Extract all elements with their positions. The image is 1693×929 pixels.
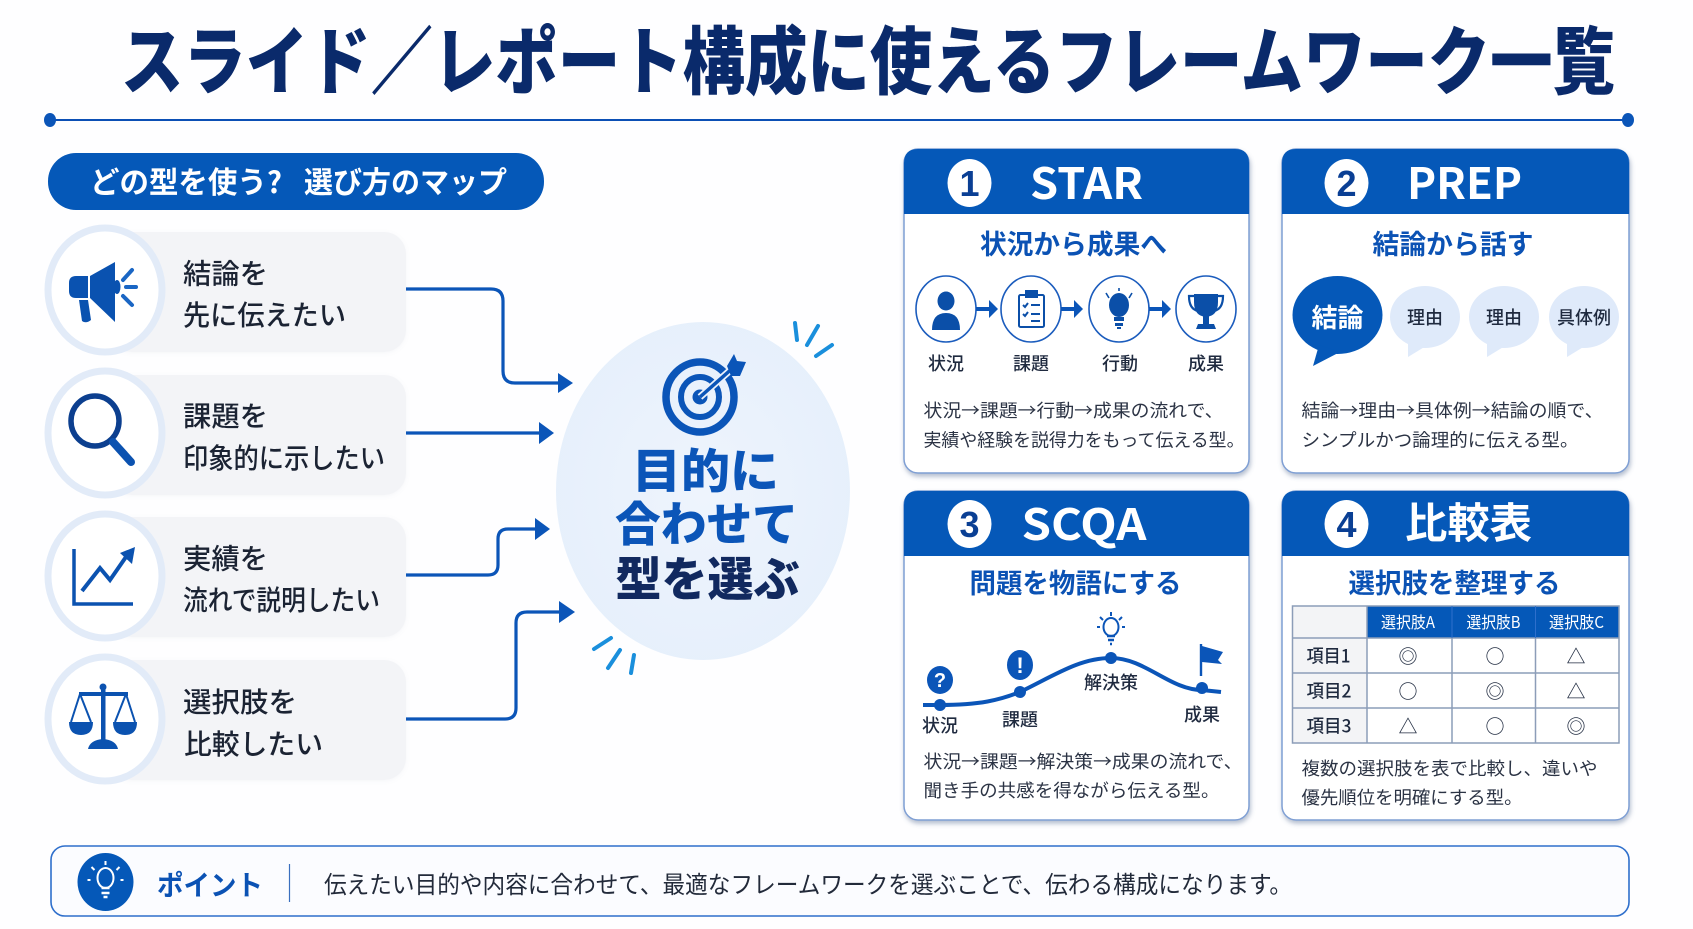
bubble: conclusion bbox=[1292, 276, 1382, 366]
row: show issue bbox=[48, 371, 406, 495]
curve labels: 課題 bbox=[1002, 706, 1038, 732]
card description bbox=[1302, 755, 1598, 810]
table symbols: ○ bbox=[1398, 677, 1418, 704]
title rule bbox=[44, 113, 1634, 127]
table header labels: 選択肢C bbox=[1549, 609, 1604, 633]
table row labels: 項目1 bbox=[1306, 642, 1350, 668]
card subtitle: 状況から成果へ bbox=[980, 223, 1167, 262]
icon: bulb outline bbox=[1097, 612, 1125, 644]
card header bbox=[904, 491, 1249, 556]
card header: 比較表 bbox=[1405, 490, 1532, 551]
bubble: reason: 理由 bbox=[1486, 304, 1522, 330]
card description bbox=[1302, 397, 1604, 452]
row text: 課題を bbox=[183, 395, 268, 435]
table symbols: △ bbox=[1566, 642, 1586, 669]
flow labels bbox=[928, 350, 1224, 376]
row text bbox=[183, 395, 385, 477]
row: explain results bbox=[48, 514, 406, 638]
table header labels: 選択肢A bbox=[1381, 609, 1435, 633]
card header bbox=[904, 149, 1249, 214]
row text: 結論を bbox=[183, 252, 268, 292]
icon: trophy bbox=[1189, 294, 1223, 329]
card header: 1 bbox=[959, 163, 980, 204]
panel: comparison table bbox=[1282, 490, 1629, 820]
row text: 実績を bbox=[183, 538, 268, 578]
card header: 2 bbox=[1336, 163, 1357, 204]
table row labels: 項目3 bbox=[1306, 712, 1352, 738]
flow labels: 成果 bbox=[1188, 350, 1224, 376]
table row labels: 項目2 bbox=[1306, 678, 1352, 704]
table row labels bbox=[1306, 642, 1352, 738]
curve labels: 状況 bbox=[922, 712, 958, 738]
card subtitle: 問題を物語にする bbox=[970, 562, 1182, 601]
sparks: upper right bbox=[795, 323, 832, 356]
table symbols: ○ bbox=[1485, 642, 1505, 669]
row text: 印象的に示したい bbox=[183, 437, 385, 477]
curve labels bbox=[922, 669, 1220, 738]
card subtitle: 結論から話す bbox=[1372, 223, 1534, 262]
bubble: reason bbox=[1469, 286, 1539, 357]
row: conclusion first bbox=[48, 228, 406, 352]
card header: SCQA bbox=[1022, 491, 1147, 553]
card header bbox=[1282, 490, 1629, 556]
table symbols: △ bbox=[1566, 677, 1586, 704]
row text bbox=[183, 252, 346, 334]
icon: target bbox=[666, 354, 746, 432]
card description: 状況→課題→解決策→成果の流れで、 bbox=[924, 748, 1242, 774]
card header: 3 bbox=[959, 504, 980, 545]
row text: 流れで説明したい bbox=[183, 579, 380, 619]
goal circle bbox=[556, 322, 850, 660]
bubble: example bbox=[1549, 286, 1619, 357]
icon: question bbox=[927, 666, 953, 694]
table symbols: ◎ bbox=[1398, 642, 1418, 669]
map heading pill: どの型を使う? bbox=[90, 158, 282, 202]
icon: megaphone bbox=[69, 262, 136, 322]
card header: 4 bbox=[1336, 504, 1357, 545]
table header labels: 選択肢B bbox=[1466, 609, 1520, 633]
flow diagram bbox=[916, 276, 1236, 376]
bubble: example: 具体例 bbox=[1557, 304, 1611, 330]
point text: 伝えたい目的や内容に合わせて、最適なフレームワークを選ぶことで、伝わる構成になります。 bbox=[324, 865, 1292, 900]
icon: clipboard bbox=[1019, 291, 1044, 327]
row text: 選択肢を bbox=[183, 681, 297, 721]
map heading pill: 選び方のマップ bbox=[304, 158, 507, 202]
flow labels: 行動 bbox=[1102, 350, 1138, 376]
story curve bbox=[922, 612, 1223, 738]
goal text bbox=[615, 433, 800, 610]
card header bbox=[1282, 149, 1629, 214]
row: compare options bbox=[48, 657, 406, 781]
panel: PREP bbox=[1282, 149, 1629, 473]
curve labels: 解決策 bbox=[1084, 669, 1138, 695]
flow labels: 課題 bbox=[1013, 350, 1049, 376]
map heading pill bbox=[48, 153, 544, 210]
card description: 状況→課題→行動→成果の流れで、 bbox=[924, 397, 1224, 423]
card description: 優先順位を明確にする型。 bbox=[1302, 784, 1522, 810]
comparison table bbox=[1292, 606, 1619, 743]
row text: 比較したい bbox=[184, 723, 323, 763]
table symbols: ◎ bbox=[1485, 677, 1505, 704]
row text bbox=[183, 538, 380, 619]
card description: 実績や経験を説得力をもって伝える型。 bbox=[924, 426, 1244, 452]
card header: PREP bbox=[1407, 150, 1522, 212]
arrow: row 4 to goal bbox=[406, 601, 575, 719]
table symbols bbox=[1398, 642, 1586, 739]
icon: flag bbox=[1201, 644, 1223, 676]
icon: magnifier bbox=[71, 396, 131, 462]
arrow: row 3 to goal bbox=[406, 518, 550, 575]
table symbols: ○ bbox=[1485, 712, 1505, 739]
bubble: reason: 理由 bbox=[1407, 304, 1443, 330]
card description: シンプルかつ論理的に伝える型。 bbox=[1302, 426, 1578, 452]
card description bbox=[924, 748, 1242, 803]
table symbols: ◎ bbox=[1566, 712, 1586, 739]
icon: question: ? bbox=[934, 670, 946, 692]
flow labels: 状況 bbox=[928, 350, 964, 376]
goal text: 目的に bbox=[632, 433, 779, 502]
card description: 複数の選択肢を表で比較し、違いや bbox=[1302, 755, 1598, 781]
icon: scales bbox=[69, 684, 137, 749]
table header labels bbox=[1381, 609, 1604, 633]
bubble: conclusion: 結論 bbox=[1312, 298, 1364, 335]
curve labels: 成果 bbox=[1184, 701, 1220, 727]
row text bbox=[183, 681, 323, 763]
card description: 結論→理由→具体例→結論の順で、 bbox=[1302, 397, 1604, 423]
panel: SCQA bbox=[904, 491, 1249, 820]
goal text: 型を選ぶ bbox=[616, 541, 800, 610]
arrow: row 1 to goal bbox=[406, 289, 573, 393]
goal text: 合わせて bbox=[615, 486, 798, 555]
icon: person bbox=[932, 292, 960, 330]
card header: STAR bbox=[1030, 150, 1143, 212]
card description: 聞き手の共感を得ながら伝える型。 bbox=[924, 777, 1220, 803]
card description bbox=[924, 397, 1244, 452]
card subtitle: 選択肢を整理する bbox=[1348, 562, 1560, 601]
arrow: row 2 to goal bbox=[406, 422, 554, 444]
row text: 先に伝えたい bbox=[183, 294, 346, 334]
panel: point callout bbox=[51, 846, 1629, 916]
sparks: lower left bbox=[594, 638, 634, 673]
speech bubbles bbox=[1292, 276, 1619, 366]
icon: light bulb bbox=[1106, 288, 1132, 329]
table symbols: △ bbox=[1398, 712, 1418, 739]
bubble: reason bbox=[1390, 286, 1460, 357]
panel: STAR bbox=[904, 149, 1249, 473]
panel: selection map bbox=[48, 153, 850, 781]
icon: light bulb badge bbox=[78, 853, 134, 911]
icon: exclamation: ! bbox=[1016, 653, 1024, 678]
icon: exclamation bbox=[1007, 650, 1033, 680]
icon: rising chart bbox=[74, 547, 135, 604]
point label: ポイント bbox=[157, 864, 263, 904]
